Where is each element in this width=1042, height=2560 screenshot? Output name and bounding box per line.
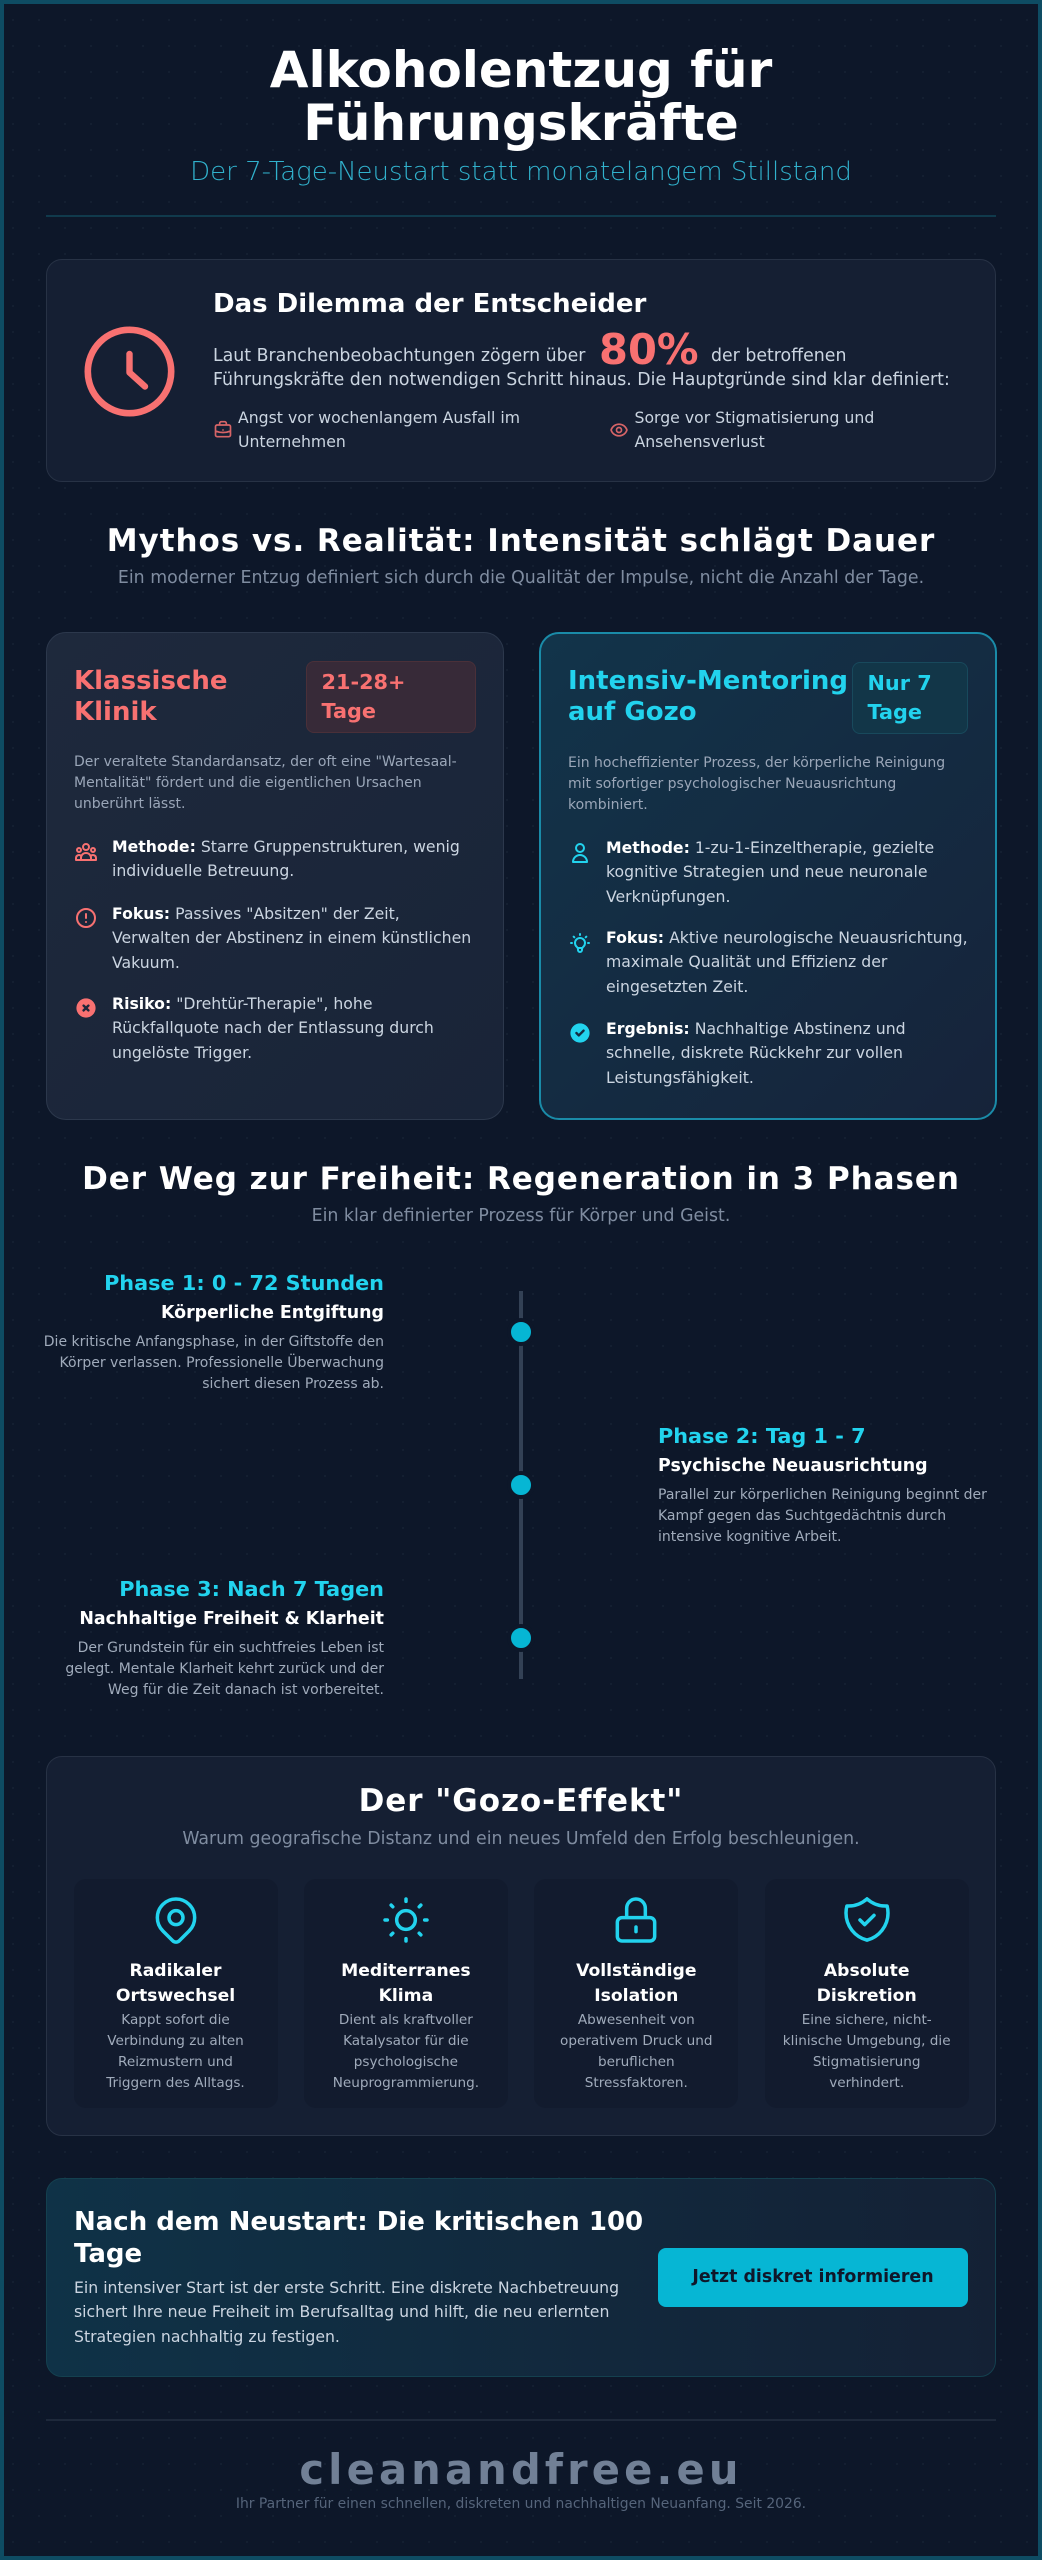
item: Methode: Methode: Starre Gruppenstrukturen, wenig	[112, 837, 460, 856]
card title	[576, 1961, 696, 2006]
card text	[783, 2012, 951, 2091]
card text	[106, 2012, 245, 2091]
timeline dot 1	[507, 1318, 535, 1346]
icon: light bulb	[570, 933, 590, 953]
badge: 21-28+ Tage: Tage	[322, 699, 376, 723]
card text: beruflichen	[598, 2054, 675, 2070]
phase 2: intensive kognitive Arbeit.	[658, 1529, 841, 1545]
footer logo: cleanandfree.eu	[299, 2445, 743, 2494]
icon: check circle	[570, 1023, 590, 1043]
card text: Stressfaktoren.	[585, 2075, 688, 2091]
item: Ergebnis: Ergebnis: Nachhaltige Abstinenz und	[606, 1019, 906, 1038]
card title: Vollständige	[576, 1961, 696, 1981]
phase 2: Psychische Neuausrichtung	[658, 1456, 928, 1476]
icon: location pin	[156, 1897, 196, 1944]
subtitle: Der 7-Tage-Neustart statt monatelangem Stillstand	[190, 157, 852, 187]
card text: Neuprogrammierung.	[333, 2075, 479, 2091]
reason: Stigmatisierung: Sorge vor Stigmatisierung und	[634, 408, 874, 427]
timeline dot 2	[507, 1471, 535, 1499]
description	[568, 755, 945, 813]
title	[270, 41, 772, 152]
item: Fokus: maximale Qualität und Effizienz der	[606, 952, 887, 971]
subtitle: Warum geografische Distanz und ein neues Umfeld den Erfolg beschleunigen.	[182, 1829, 860, 1849]
icon: shield check	[844, 1897, 890, 1942]
description: Ein hocheffizienter Prozess, der körperliche Reinigung	[568, 755, 945, 771]
item: Ergebnis: Leistungsfähigkeit.	[606, 1068, 754, 1087]
body text with 80% statistic	[213, 325, 950, 390]
reason: Ausfall	[214, 408, 520, 451]
reason: Stigmatisierung	[610, 408, 874, 451]
card title: Radikaler	[129, 1961, 222, 1981]
item: Fokus	[570, 928, 968, 996]
card text: Triggern des Alltags.	[106, 2075, 245, 2091]
heading: Nach dem Neustart: Die kritischen 100	[74, 2207, 643, 2237]
card title: Ortswechsel	[116, 1986, 235, 2006]
item: Fokus: Verwalten der Abstinenz in einem künstlichen	[112, 928, 471, 947]
description: unberührt lässt.	[74, 796, 185, 812]
icon: sun	[383, 1897, 429, 1943]
card text: verhindert.	[829, 2075, 904, 2091]
card text: Abwesenheit von	[578, 2012, 695, 2028]
card title: Absolute	[824, 1961, 910, 1981]
heading: Tage	[74, 2238, 142, 2268]
body text with 80% statistic: Führungskräfte den notwendigen Schritt hinaus. Die Hauptgründe sind klar definiert:	[213, 370, 950, 390]
card: Radikaler Ortswechsel	[74, 1879, 278, 2108]
card: Mediterranes Klima	[304, 1879, 508, 2108]
description: mit sofortiger psychologischer Neuausrichtung	[568, 776, 896, 792]
card text: psychologische	[354, 2054, 458, 2070]
item: Fokus: Fokus: Aktive neurologische Neuausrichtung,	[606, 928, 968, 947]
body text with 80% statistic: der betroffenen	[711, 346, 846, 366]
item: Methode	[572, 838, 934, 906]
card title	[116, 1961, 235, 2006]
description: kombiniert.	[568, 797, 648, 813]
description	[74, 754, 457, 812]
phase 1: sichert diesen Prozess ab.	[202, 1376, 384, 1392]
icon: briefcase	[214, 420, 232, 438]
panel: Klassische Klinik	[46, 632, 504, 1120]
card text	[560, 2012, 713, 2091]
item: Fokus: eingesetzten Zeit.	[606, 977, 748, 996]
icon: eye	[610, 423, 628, 437]
card text: klinische Umgebung, die	[783, 2033, 951, 2049]
badge: 21-28+ Tage: 21-28+	[322, 670, 405, 694]
section subtitle: Ein moderner Entzug definiert sich durch die Qualität der Impulse, nicht die Anzahl der Tage.	[118, 568, 924, 588]
body text with 80% statistic: 80%	[599, 325, 699, 374]
icon: clock	[84, 326, 174, 416]
description: Mentalität" fördert und die eigentlichen Ursachen	[74, 775, 422, 791]
text: sichert Ihre neue Freiheit im Berufsalltag und hilft, die neu erlernten	[74, 2302, 609, 2321]
section heading: Mythos vs. Realität: Mythos vs. Realität: Intensität schlägt Dauer	[107, 523, 935, 559]
card text: Reizmustern und	[118, 2054, 233, 2070]
item: Risiko	[76, 994, 434, 1062]
phase 1: Körperliche Entgiftung	[161, 1303, 384, 1323]
icon: exclamation circle	[76, 908, 96, 928]
card title: Isolation	[594, 1986, 678, 2006]
description: Der veraltete Standardansatz, der oft eine "Wartesaal-	[74, 754, 457, 770]
item: Ergebnis: schnelle, diskrete Rückkehr zur vollen	[606, 1043, 903, 1062]
card text: Dient als kraftvoller	[339, 2012, 473, 2028]
heading	[74, 2207, 643, 2268]
phase 1	[44, 1271, 384, 1392]
phase 3	[65, 1577, 384, 1698]
panel: Intensiv-Mentoring auf Gozo	[539, 632, 997, 1120]
item: Methode: Verknüpfungen.	[606, 887, 730, 906]
phase 2: Phase 2: Tag 1 - 7	[658, 1424, 866, 1448]
phase 1: Die kritische Anfangsphase, in der Giftstoffe den	[44, 1334, 384, 1350]
card title: Diskretion	[817, 1986, 917, 2006]
phase 3: Phase 3: Nach 7 Tagen	[119, 1577, 384, 1601]
card title: Klassische	[74, 666, 228, 696]
item: Fokus: Fokus: Passives "Absitzen" der Zeit,	[112, 904, 400, 923]
badge: Nur 7 Tage: Tage	[868, 700, 922, 724]
panel: Gozo-Effekt	[46, 1756, 996, 2136]
section heading: Der Weg zur Freiheit: Der Weg zur Freiheit: Regeneration in 3 Phasen	[82, 1161, 960, 1197]
reason: Stigmatisierung: Ansehensverlust	[634, 432, 765, 451]
phase 3: Weg für die Zeit danach ist vorbereitet.	[108, 1682, 384, 1698]
card title: Klinik	[74, 697, 157, 727]
timeline line	[519, 1291, 523, 1679]
card text: operativem Druck und	[560, 2033, 713, 2049]
card text: Stigmatisierung	[813, 2054, 921, 2070]
card title	[341, 1961, 471, 2006]
phase 2: Parallel zur körperlichen Reinigung beginnt der	[658, 1487, 987, 1503]
text: Ein intensiver Start ist der erste Schritt. Eine diskrete Nachbetreuung	[74, 2278, 619, 2297]
card text	[333, 2012, 479, 2091]
badge: Nur 7 Tage	[852, 662, 968, 734]
badge: 21-28+ Tage	[306, 661, 476, 733]
item: Methode	[75, 837, 460, 880]
card title	[817, 1961, 917, 2006]
card title	[74, 666, 228, 727]
heading: Der "Gozo-Effekt"	[359, 1783, 683, 1819]
item: Methode: individuelle Betreuung.	[112, 861, 294, 880]
title: Alkoholentzug für	[270, 41, 772, 99]
phase 2: Kampf gegen das Suchtgedächtnis durch	[658, 1508, 946, 1524]
item: Risiko: Rückfallquote nach der Entlassung durch	[112, 1018, 434, 1037]
button: Jetzt diskret informieren	[692, 2267, 934, 2287]
card title: auf Gozo	[568, 697, 697, 727]
item: Risiko: ungelöste Trigger.	[112, 1043, 252, 1062]
body text with 80% statistic: Laut Branchenbeobachtungen zögern über	[213, 346, 585, 366]
timeline	[44, 1271, 987, 1698]
phase 1: Körper verlassen. Professionelle Überwachung	[60, 1355, 384, 1371]
phase 1: Phase 1: 0 - 72 Stunden	[104, 1271, 384, 1295]
card text: Kappt sofort die	[121, 2012, 230, 2028]
button	[658, 2248, 968, 2307]
reason: Ausfall: Unternehmen	[238, 432, 346, 451]
panel: call to action	[46, 2178, 996, 2377]
card title	[568, 666, 848, 727]
card title: Intensiv-Mentoring	[568, 666, 848, 696]
icon: lock	[616, 1897, 656, 1943]
phase 3: gelegt. Mentale Klarheit kehrt zurück und der	[65, 1661, 384, 1677]
phase 2	[658, 1424, 987, 1545]
icon: x circle	[76, 998, 96, 1018]
item: Fokus: Vakuum.	[112, 953, 180, 972]
card: Absolute Diskretion	[765, 1879, 969, 2108]
icon: user	[572, 843, 588, 863]
card text: Katalysator für die	[343, 2033, 469, 2049]
item: Ergebnis	[570, 1019, 906, 1087]
card text: Verbindung zu alten	[107, 2033, 244, 2049]
item: Methode: kognitive Strategien und neue neuronale	[606, 862, 928, 881]
section subtitle: Ein klar definierter Prozess für Körper und Geist.	[312, 1206, 730, 1226]
phase 3: Der Grundstein für ein suchtfreies Leben ist	[78, 1640, 384, 1656]
card title: Klima	[379, 1986, 433, 2006]
reason: Ausfall: Angst vor wochenlangem Ausfall im	[238, 408, 520, 427]
card text: Eine sichere, nicht-	[802, 2012, 932, 2028]
panel: Das Dilemma der Entscheider	[46, 259, 996, 482]
title: Führungskräfte	[303, 94, 739, 152]
timeline dot 3	[507, 1624, 535, 1652]
heading: Das Dilemma der Entscheider	[213, 289, 646, 319]
text	[74, 2276, 619, 2349]
card: Vollständige Isolation	[534, 1879, 738, 2108]
text: Strategien nachhaltig zu festigen.	[74, 2327, 340, 2346]
item: Risiko: Risiko: "Drehtür-Therapie", hohe	[112, 994, 373, 1013]
item: Fokus	[76, 904, 471, 972]
card title: Mediterranes	[341, 1961, 471, 1981]
badge: Nur 7 Tage: Nur 7	[868, 671, 932, 695]
item: Methode: Methode: 1-zu-1-Einzeltherapie, gezielte	[606, 838, 934, 857]
icon: group	[75, 843, 97, 861]
phase 3: Nachhaltige Freiheit & Klarheit	[79, 1609, 384, 1629]
footer tagline: Ihr Partner für einen schnellen, diskreten und nachhaltigen Neuanfang. Seit 2026.	[236, 2496, 806, 2512]
